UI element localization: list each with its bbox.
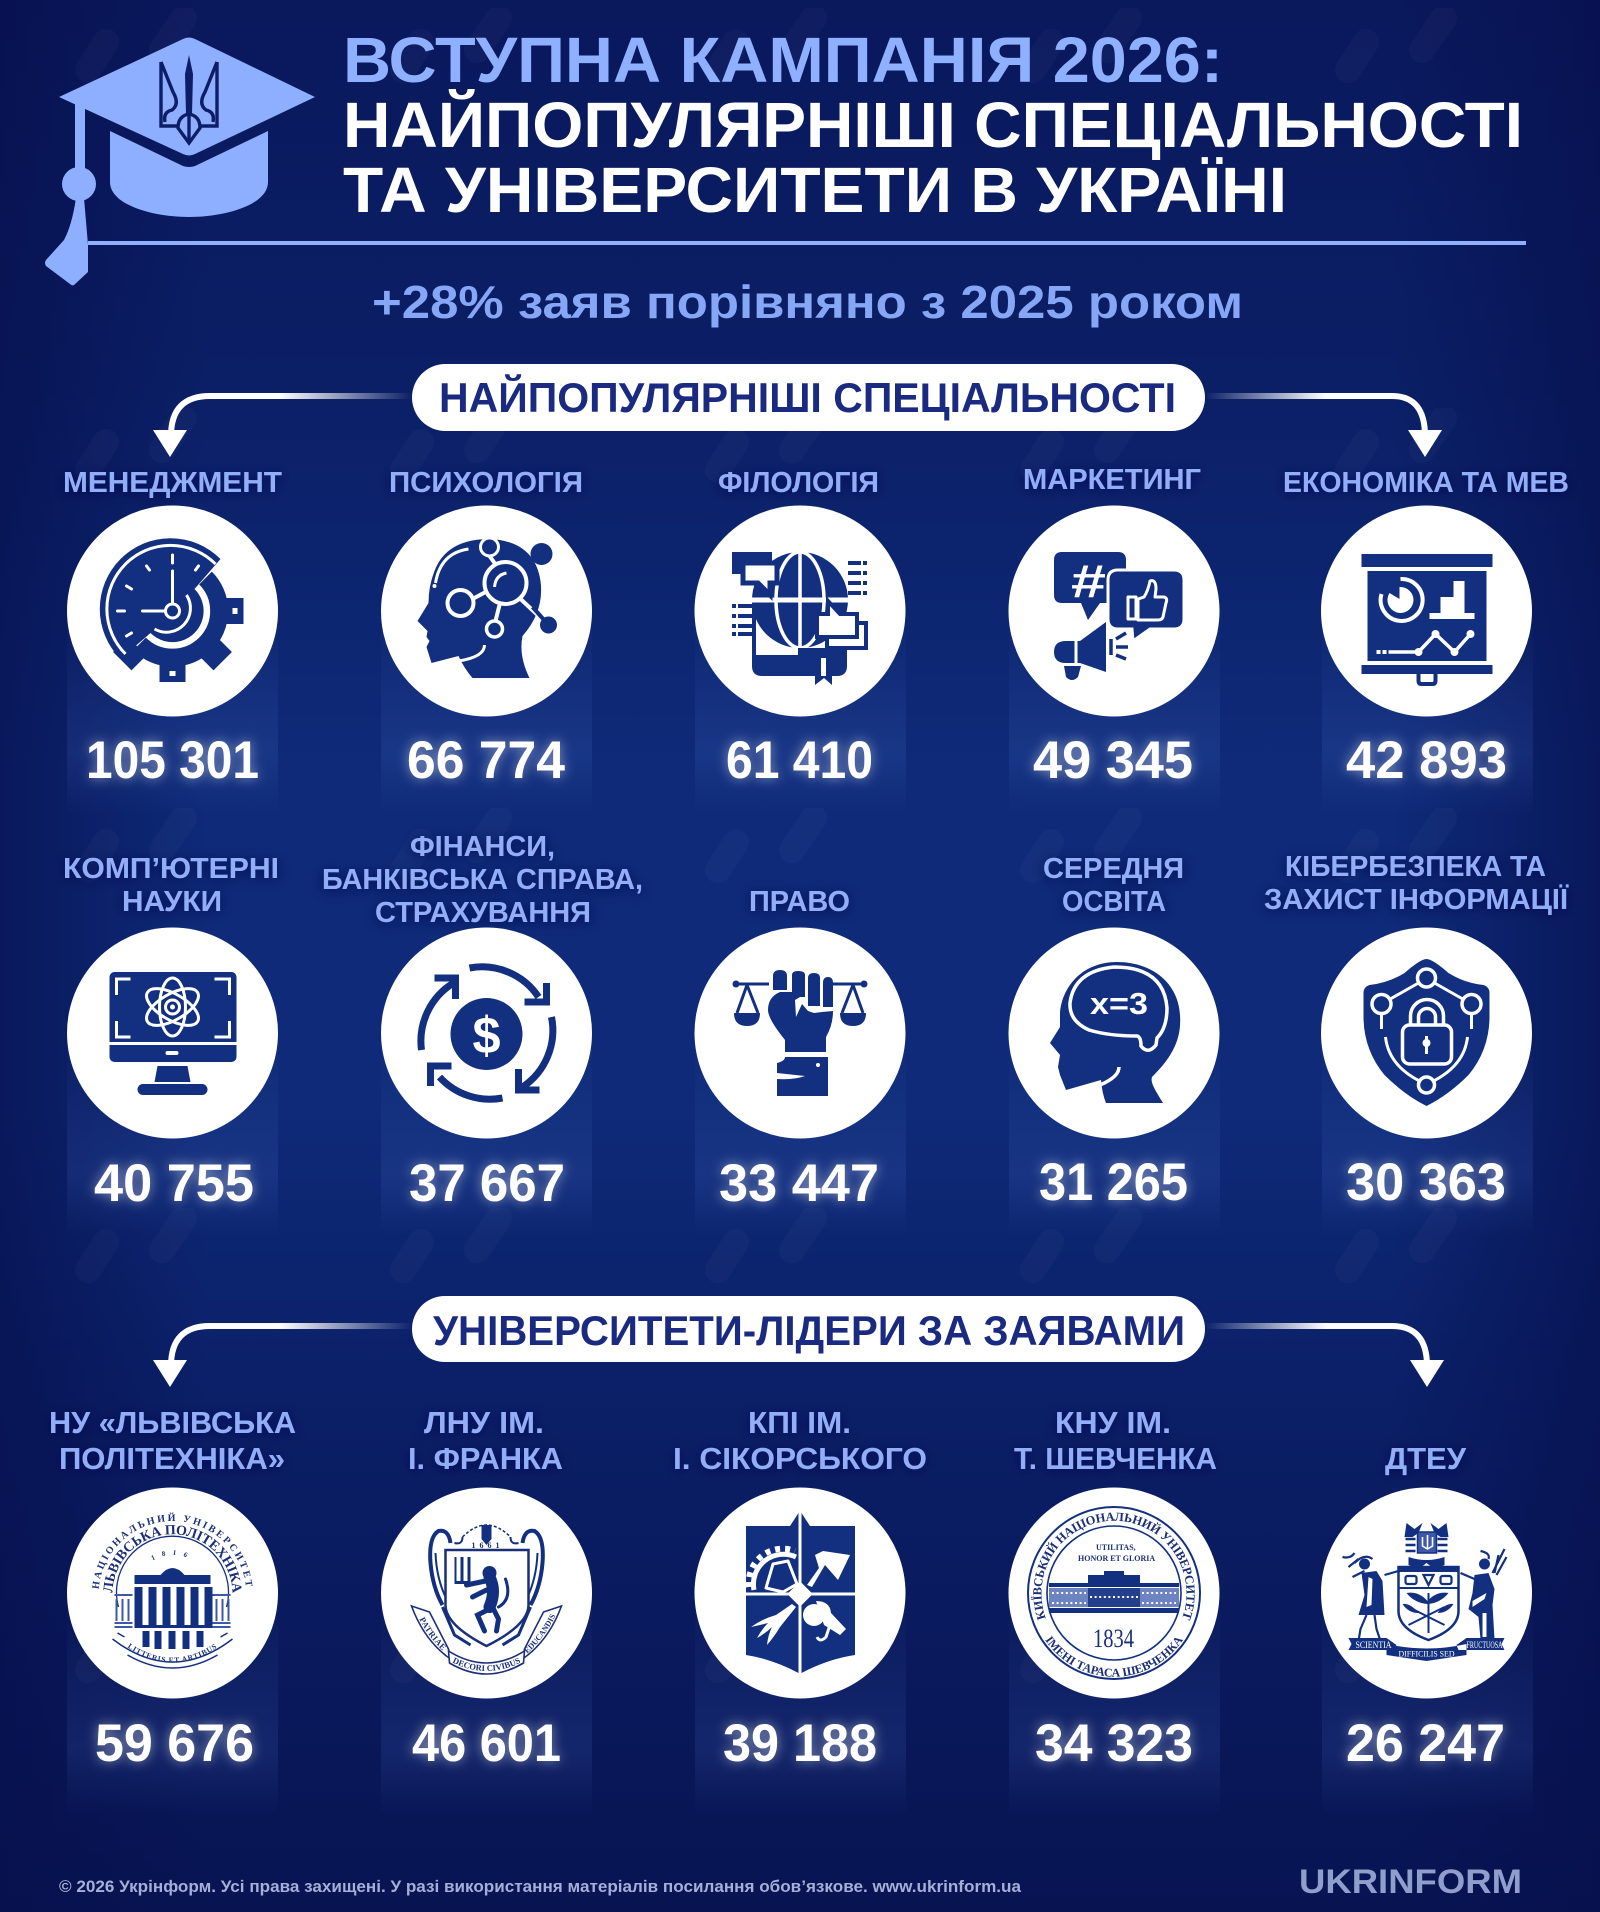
label	[1043, 853, 1184, 918]
value: 40 755	[94, 1154, 254, 1213]
label: ЗАХИСТ ІНФОРМАЦІЇ	[1264, 883, 1569, 916]
label	[63, 853, 279, 918]
label: МЕНЕДЖМЕНТ	[63, 467, 282, 499]
panel: середня освіта	[1008, 853, 1220, 1212]
icon: KNU seal: 1834	[1093, 1624, 1134, 1653]
label: І. СІКОРСЬКОГО	[673, 1441, 927, 1476]
label: КОМП’ЮТЕРНІ	[63, 853, 279, 885]
label: БАНКІВСЬКА СПРАВА,	[322, 864, 643, 896]
arrow: section 1 left	[153, 396, 412, 457]
label: ДТЕУ	[1385, 1441, 1467, 1476]
icon: Lviv Polytechnic seal: ЛЬВІВСЬКА ПОЛІТЕХНІКА	[103, 1525, 242, 1593]
icon: KNU seal: ІМЕНІ ТАРАСА ШЕВЧЕНКА	[1045, 1636, 1184, 1677]
label: НАУКИ	[122, 886, 222, 918]
value: 105 301	[86, 731, 259, 790]
panel: ЛНУ Франка	[381, 1405, 592, 1773]
right figure	[1460, 1549, 1506, 1639]
label: НУ «ЛЬВІВСЬКА	[49, 1405, 296, 1440]
motto ribbon: SCIENTIA	[1356, 1640, 1392, 1650]
title	[343, 24, 1523, 226]
icon: head with equation	[1008, 928, 1220, 1138]
label: СТРАХУВАННЯ	[375, 897, 591, 929]
icon: Lviv Polytechnic seal	[67, 1488, 278, 1698]
label: ФІНАНСИ,	[410, 831, 555, 863]
panel: КНУ Шевченка	[1008, 1405, 1220, 1773]
value: 30 363	[1346, 1153, 1506, 1212]
label: КІБЕРБЕЗПЕКА ТА	[1285, 851, 1546, 883]
panel: право	[694, 886, 906, 1213]
value: 39 188	[723, 1714, 877, 1773]
title: ВСТУПНА КАМПАНІЯ 2026:	[343, 24, 1223, 96]
icon: Lviv Polytechnic seal: LITTERIS ET ARTIBUS	[127, 1643, 216, 1663]
arrow: section 2 left	[153, 1326, 412, 1387]
crest	[1404, 1523, 1448, 1569]
icon: KNU seal	[1008, 1488, 1220, 1698]
title: НАЙПОПУЛЯРНІШІ СПЕЦІАЛЬНОСТІ	[343, 88, 1523, 161]
panel: економіка та МЕВ	[1283, 467, 1569, 790]
label: Т. ШЕВЧЕНКА	[1014, 1441, 1217, 1476]
value: 26 247	[1346, 1714, 1505, 1773]
arrow: section 2 right	[1205, 1326, 1444, 1387]
value: 59 676	[95, 1714, 254, 1773]
panel: кібербезпека	[1264, 851, 1569, 1212]
icon: dollar with circular arrows: $	[472, 1007, 501, 1065]
panel: комп'ютерні науки	[63, 853, 279, 1213]
label: КНУ ІМ.	[1055, 1405, 1171, 1440]
motto ribbon	[1348, 1638, 1504, 1661]
label: ЛНУ ІМ.	[424, 1405, 544, 1440]
label: ФІЛОЛОГІЯ	[718, 467, 879, 499]
shield	[1398, 1567, 1458, 1640]
icon: graduation cap with trident	[45, 38, 315, 285]
icon: KNU seal: КИЇВСЬКИЙ НАЦІОНАЛЬНИЙ УНІВЕРСИТЕТ	[1031, 1512, 1195, 1621]
label: МАРКЕТИНГ	[1023, 464, 1201, 496]
label	[49, 1405, 296, 1476]
icon: presentation board	[1321, 506, 1532, 716]
icon: KNU seal: UTILITAS,	[1096, 1543, 1136, 1552]
value: 34 323	[1035, 1714, 1193, 1773]
panel: маркетинг	[1008, 464, 1220, 790]
panel: психологія	[381, 467, 592, 790]
panel: КПІ Сікорського	[673, 1405, 927, 1773]
footer copyright: © 2026 Укрінформ. Усі права захищені. У разі використання матеріалів посилання обов’язкове. www.ukrinform.ua	[59, 1877, 1022, 1896]
panel: львівська політехніка	[49, 1405, 296, 1773]
panel: ДТЕУ	[1321, 1441, 1532, 1773]
heading: leading universities	[412, 1296, 1205, 1362]
icon: Lviv Polytechnic seal: НАЦІОНАЛЬНИЙ УНІВЕРСИТЕТ	[92, 1512, 252, 1590]
label: ОСВІТА	[1062, 886, 1166, 918]
label: І. ФРАНКА	[408, 1441, 563, 1476]
icon: clock and gear	[67, 506, 278, 716]
label: КПІ ІМ.	[748, 1405, 851, 1440]
value: 42 893	[1346, 731, 1507, 790]
icon: LNU coat of arms: PATRIAE	[419, 1616, 446, 1650]
icon: DTEU coat of arms	[1321, 1488, 1532, 1698]
icon: social media marketing	[1008, 506, 1220, 716]
icon: dollar with circular arrows	[381, 928, 592, 1138]
value: 37 667	[409, 1154, 565, 1213]
panel: філологія	[694, 467, 906, 790]
logo: Ukrinform: UKRINFORM	[1299, 1863, 1522, 1901]
left figure	[1342, 1553, 1398, 1643]
subtitle: +28% заяв порівняно з 2025 роком	[372, 276, 1243, 328]
title: ТА УНІВЕРСИТЕТИ В УКРАЇНІ	[343, 154, 1287, 226]
label: ПРАВО	[749, 886, 850, 918]
heading: popular specialties	[412, 364, 1205, 431]
icon: head with network	[381, 506, 592, 716]
icon: LNU coat of arms: EDUCANDIS	[525, 1614, 555, 1654]
label: ПСИХОЛОГІЯ	[389, 467, 583, 499]
icon: shield with lock	[1321, 928, 1532, 1138]
icon: globe on book with chat bubbles	[694, 506, 906, 716]
label: ЕКОНОМІКА ТА МЕВ	[1283, 467, 1569, 499]
label: СЕРЕДНЯ	[1043, 853, 1184, 885]
panel: менеджмент	[63, 467, 282, 790]
label	[673, 1405, 927, 1476]
icon: fist with scales	[694, 928, 906, 1138]
value: 31 265	[1039, 1153, 1188, 1212]
icon: Lviv Polytechnic seal: 1816	[151, 1550, 188, 1560]
icon: social media marketing: #	[1071, 555, 1106, 607]
panel: фінанси	[322, 831, 643, 1213]
icon: LNU coat of arms: 1661	[472, 1541, 504, 1550]
label	[408, 1405, 563, 1476]
icon: LNU coat of arms	[381, 1488, 592, 1698]
icon: LNU coat of arms: DECORI CIVIBUS	[452, 1657, 520, 1671]
icon: KNU seal: HONOR ET GLORIA	[1078, 1554, 1155, 1563]
motto ribbon: FRUCTUOSA	[1466, 1640, 1503, 1650]
label	[1264, 851, 1569, 916]
value: 49 345	[1033, 731, 1193, 790]
label	[322, 831, 643, 929]
label	[1014, 1405, 1217, 1476]
value: 33 447	[719, 1154, 879, 1213]
label: ПОЛІТЕХНІКА»	[59, 1441, 285, 1476]
value: 66 774	[407, 731, 566, 790]
heading: leading universities: УНІВЕРСИТЕТИ-ЛІДЕРИ ЗА ЗАЯВАМИ	[433, 1307, 1185, 1354]
motto ribbon: DIFFICILIS SED	[1398, 1650, 1455, 1658]
value: 61 410	[726, 731, 873, 790]
arrow: section 1 right	[1205, 396, 1442, 457]
icon: monitor with atom	[67, 928, 278, 1138]
value: 46 601	[412, 1714, 561, 1773]
icon: KPI shield	[694, 1488, 906, 1698]
heading: popular specialties: НАЙПОПУЛЯРНІШІ СПЕЦІАЛЬНОСТІ	[439, 373, 1176, 421]
icon: head with equation: x=3	[1090, 986, 1148, 1021]
